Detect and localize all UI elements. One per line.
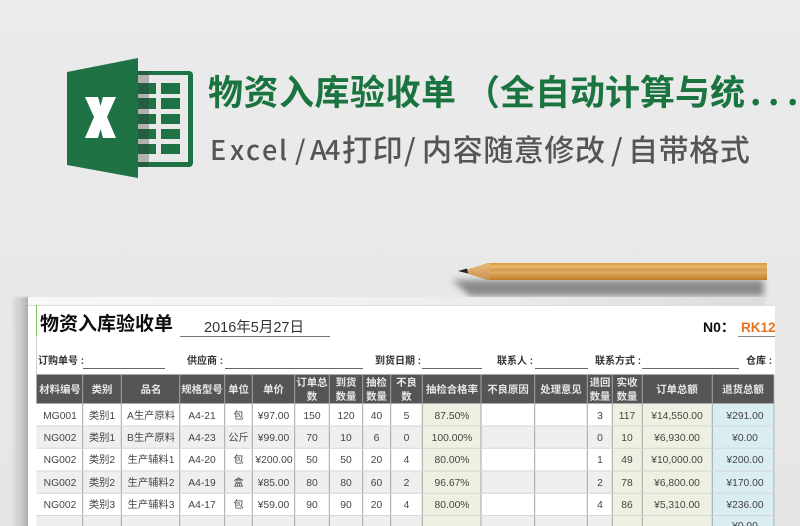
title: （: [465, 65, 500, 116]
row 2: 70: [306, 433, 318, 444]
row 1: [43, 409, 764, 422]
row 2: 10: [621, 433, 633, 444]
row 1: 包: [233, 409, 244, 422]
row 4: 类别2: [89, 476, 115, 489]
row 2: A4-23: [188, 433, 216, 444]
row 2: [44, 431, 758, 444]
row 1: 5: [404, 411, 410, 422]
table header: 数: [401, 390, 412, 403]
row 3: 50: [340, 455, 352, 466]
row 5: 80.00%: [435, 500, 469, 511]
row 2: 0: [404, 433, 410, 444]
row 1: 117: [619, 411, 635, 422]
row 2: ¥99.00: [257, 433, 290, 444]
row 2: 6: [374, 433, 380, 444]
row 5: 4: [597, 500, 603, 511]
document number: N0：: [703, 319, 735, 335]
row 3: 50: [306, 455, 318, 466]
row 2: 100.00%: [432, 433, 472, 444]
table grid: [36, 375, 774, 526]
row 4: 盒: [233, 476, 244, 489]
table header: 退货总额: [722, 383, 764, 396]
table header: 数量: [590, 390, 610, 403]
table rows: [43, 409, 764, 526]
row 5: 86: [621, 500, 633, 511]
row 3: 80.00%: [435, 455, 469, 466]
table header: [36, 374, 774, 404]
date field: 2016年5月27日: [204, 319, 304, 336]
subtitle: 打印: [342, 126, 403, 170]
row 5: 4: [404, 500, 410, 511]
row 1: 87.50%: [435, 411, 469, 422]
row 1: MG001: [43, 411, 77, 422]
row 1: 类别1: [89, 409, 115, 422]
row 4: 60: [371, 478, 382, 489]
table header: 不良原因: [487, 383, 529, 396]
row 4: 2: [404, 478, 410, 489]
row 1: ¥291.00: [725, 411, 764, 422]
table header: 处理意见: [540, 383, 582, 396]
subtitle: [210, 126, 750, 170]
title: 全自动计算与统: [500, 65, 745, 116]
row 5: 90: [306, 500, 318, 511]
row 4: [44, 476, 764, 489]
row 2: 0: [597, 433, 603, 444]
row 1: ¥97.00: [257, 411, 290, 422]
row 1: 40: [371, 411, 382, 422]
table header: 数量: [366, 390, 387, 403]
form fields: [38, 354, 772, 369]
row stripes and coloured columns: [36, 404, 774, 526]
row 1: 3: [597, 411, 603, 422]
row 3: 类别2: [89, 453, 115, 466]
table header: 类别: [92, 383, 112, 396]
row 3: ¥10,000.00: [650, 455, 703, 466]
row 2: ¥6,930.00: [653, 433, 700, 444]
row 5: 包: [233, 498, 244, 511]
row 2: B生产原料: [127, 431, 175, 444]
table header: 抽检合格率: [426, 383, 478, 396]
document number: RK12: [741, 320, 776, 335]
row 3: 4: [404, 455, 410, 466]
row 2: ¥0.00: [731, 433, 758, 444]
row 3: A4-20: [188, 455, 216, 466]
row 2: 10: [340, 433, 352, 444]
subtitle: 自带格式: [628, 126, 750, 170]
form fields: 仓库 :: [746, 354, 772, 367]
form fields: 联系人 :: [497, 354, 533, 367]
row 3: 生产辅料1: [128, 453, 175, 466]
table header: 退回: [590, 376, 610, 389]
row 3: ¥200.00: [254, 455, 293, 466]
row 5: 90: [340, 500, 352, 511]
row 4: ¥170.00: [725, 478, 764, 489]
row 1: ¥14,550.00: [650, 411, 703, 422]
table header: 单价: [263, 383, 284, 396]
title: [208, 65, 798, 116]
table header: 单位: [228, 383, 249, 396]
row 5: 类别3: [89, 498, 115, 511]
row 3: 1: [597, 455, 603, 466]
table header: 材料编号: [39, 383, 81, 396]
row 1: A4-21: [188, 411, 216, 422]
row 5: ¥59.00: [257, 500, 290, 511]
row 4: NG002: [44, 478, 77, 489]
subtitle: /: [611, 126, 623, 170]
icon: pencil: [452, 263, 767, 296]
form fields: 到货日期 :: [375, 354, 421, 367]
row 1: 120: [337, 411, 355, 422]
title: 物资入库验收单: [208, 65, 457, 116]
row 4: 生产辅料2: [128, 476, 175, 489]
subtitle: Excel/A4: [210, 129, 340, 168]
row 2: 公斤: [228, 432, 249, 444]
table header: 不良: [396, 376, 417, 389]
spreadsheet panel: [28, 297, 776, 526]
row 4: 96.67%: [435, 478, 469, 489]
icon: excel logo: [67, 58, 193, 178]
row 2: 类别1: [89, 431, 115, 444]
row 4: 80: [340, 478, 352, 489]
sheet shadow: [12, 297, 30, 526]
row 5: ¥5,310.00: [653, 500, 700, 511]
row 5: NG002: [44, 500, 77, 511]
table header: 品名: [141, 383, 161, 396]
subtitle: 内容随意修改: [422, 126, 606, 170]
row 3: 包: [233, 453, 244, 466]
row 3: ¥200.00: [725, 455, 764, 466]
row 4: ¥6,800.00: [653, 478, 700, 489]
table header: 数: [307, 390, 318, 403]
row 3: NG002: [44, 455, 77, 466]
row 4: 78: [621, 478, 633, 489]
sheet heading: 物资入库验收单: [40, 312, 173, 335]
row 4: 2: [597, 478, 603, 489]
form fields: 联系方式 :: [595, 354, 641, 367]
row 3: 49: [621, 455, 633, 466]
table header: 数量: [336, 390, 356, 403]
row 5: ¥236.00: [725, 500, 764, 511]
row 5: [44, 498, 764, 511]
table header: 抽检: [366, 376, 387, 389]
form fields: 订购单号 :: [38, 354, 84, 367]
row 2: NG002: [44, 433, 77, 444]
row 5: 20: [371, 500, 382, 511]
table header: 规格型号: [181, 383, 223, 396]
row 3: 20: [371, 455, 382, 466]
row 4: A4-19: [188, 478, 216, 489]
row 3: [44, 453, 764, 466]
row 5: 生产辅料3: [128, 498, 175, 511]
row 1: 150: [303, 411, 321, 422]
row 5: A4-17: [188, 500, 216, 511]
table header: 实收: [617, 376, 638, 389]
document number: [703, 319, 776, 337]
table header: 订单总: [296, 376, 328, 389]
table header: 数量: [617, 390, 637, 403]
subtitle: /: [404, 126, 416, 170]
form fields: 供应商 :: [187, 354, 223, 367]
title: ...: [750, 65, 798, 116]
table header: 订单总额: [656, 383, 698, 396]
row 4: ¥85.00: [257, 478, 290, 489]
row 1: A生产原料: [127, 409, 175, 422]
row 4: 80: [306, 478, 318, 489]
table header: 到货: [336, 376, 356, 389]
